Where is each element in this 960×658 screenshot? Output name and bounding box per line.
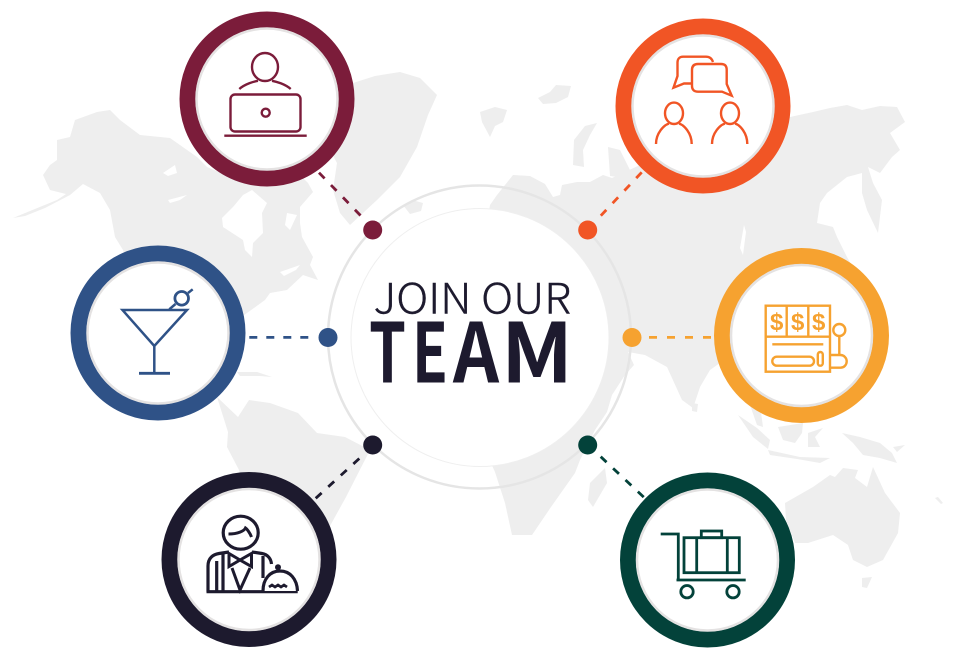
badge: luggage cart [628,480,787,640]
icon: slot machine [766,306,847,372]
badge: waiter [170,480,328,639]
heading line: join our: JOIN OUR [374,266,571,326]
connector: laptop worker [319,173,382,240]
badge: slot machine [722,256,881,415]
centre white disc [351,208,609,466]
world map background [13,72,943,588]
heading line: team: E [412,288,448,406]
outer ring of centre circle [328,186,631,488]
slot reel symbols: $ [770,309,784,336]
connector: conversation [578,172,642,240]
icon: two people talking [656,57,747,144]
slot reel symbols: $ [791,309,805,336]
connector: slot machine [622,328,711,347]
heading line: team [369,288,573,406]
slot reel symbols [770,309,826,336]
heading line: team: M [501,288,573,406]
heading line: team: A [452,288,499,406]
badge: cocktail [78,254,238,412]
slot reel symbols: $ [812,309,826,336]
icon: waiter with cloche [206,516,298,592]
connector: luggage [578,436,645,498]
connector: cocktail [249,328,338,347]
badge: conversation [624,26,782,186]
icon: luggage cart [661,531,746,598]
heading line: team: T [369,288,406,406]
icon: person at laptop [224,53,307,136]
badge: laptop worker [188,20,346,178]
connector: waiter [316,436,382,498]
centre heading [369,266,573,406]
icon: martini glass [122,289,193,373]
